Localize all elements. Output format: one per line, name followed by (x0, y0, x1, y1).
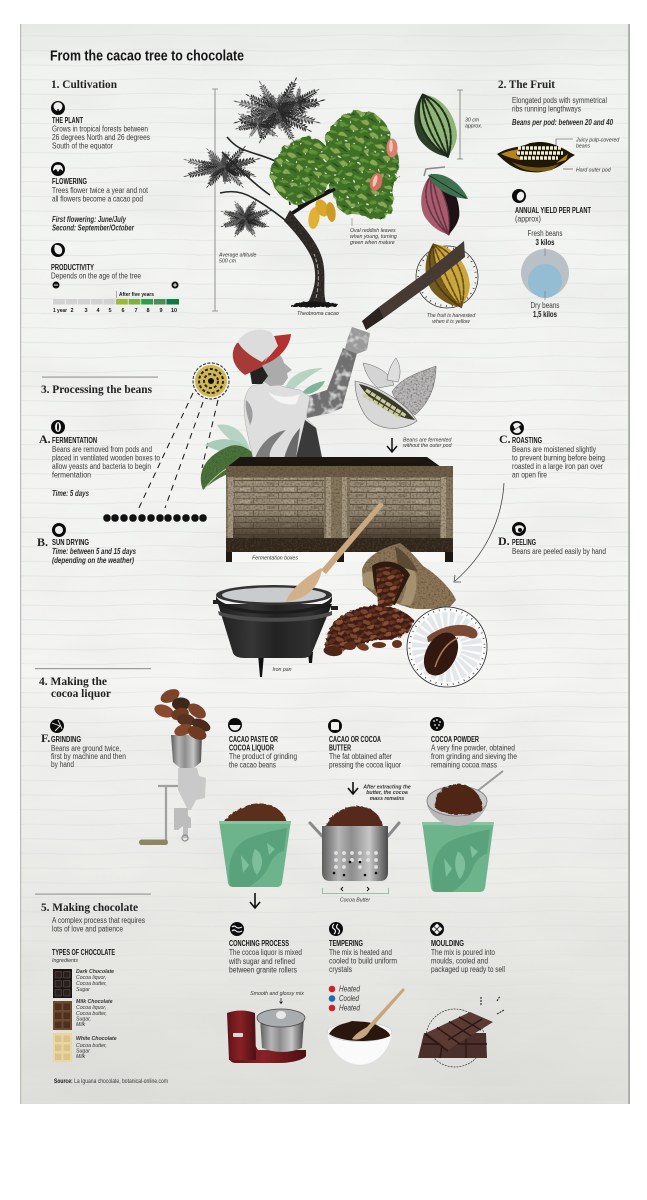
caption: glossy mix (250, 991, 304, 1004)
caption: mass remains: butter, the cocoa (366, 790, 408, 796)
milk chocolate text (76, 999, 113, 1028)
wooden spoon (286, 502, 384, 602)
text block: intro: A complex process that requires (52, 916, 145, 925)
upper chocolate bar (425, 1012, 493, 1052)
hand grinder (139, 686, 212, 845)
text block: moulding: MOULDING (431, 939, 464, 948)
leader: juicy beans: beans (576, 144, 591, 150)
caption: leaves (350, 218, 397, 246)
heading: cocoa liquor (39, 674, 111, 700)
milk chocolate text: Milk Chocolate (76, 999, 113, 1005)
text block: moulding: moulds, cooled and (431, 956, 488, 966)
text block: roasting: roasted in a large iron pan over (512, 462, 603, 471)
text block: productivity: Depends on the age of the tree (51, 272, 141, 280)
grinder hopper (171, 735, 202, 768)
text block: cacao paste: the cacao beans (229, 760, 276, 770)
illustration: cacao tree (181, 70, 399, 317)
text block: peeling: PEELING (512, 538, 536, 547)
text block: the plant: Grows in tropical forests between (52, 124, 148, 134)
roasted bean (417, 625, 477, 681)
farmer cap visor (262, 334, 291, 365)
yellow pods (307, 197, 337, 230)
farmer (233, 327, 370, 458)
black and white foliage (181, 70, 328, 244)
dial ticks (418, 248, 476, 306)
dial (426, 1009, 484, 1067)
heading: processing: 3. Processing the beans (41, 382, 152, 396)
white chocolate text: Milk (76, 1054, 86, 1060)
altitude ruler: Average altitude (218, 252, 257, 258)
sieve with powder (427, 771, 503, 826)
caption: glossy mix: Smooth and glossy mix (250, 991, 304, 997)
bowl rim (327, 1022, 392, 1042)
text block: peeling (498, 534, 606, 556)
icon: tempering (329, 922, 343, 936)
text block: sun drying: Time: between 5 and 15 days (52, 547, 137, 556)
caption: iron pan: Iron pan (272, 667, 292, 673)
milk chocolate text: Milk (76, 1022, 86, 1028)
productivity scale chart: 5 (108, 308, 112, 314)
cocoa butter bracket: Cocoa Butter (340, 898, 370, 904)
text block: flowering (52, 177, 149, 232)
productivity scale chart: 4 (96, 308, 100, 314)
heading: The Fruit: 2. The Fruit (498, 77, 555, 91)
section rule (35, 668, 151, 669)
text block: fermentation: fermentation (52, 470, 91, 480)
panel: 2. The Fruit (497, 77, 620, 319)
text block: intro: lots of love and patience (52, 924, 123, 934)
wet grinder machine (227, 1009, 306, 1063)
machine base (229, 1045, 306, 1063)
text block: conching: between granite rollers (229, 966, 297, 974)
text block: cacao paste: CACAO PASTE OR (229, 735, 278, 744)
text block: roasting: to prevent burning before being (512, 454, 605, 462)
white chocolate text: White Chocolate (76, 1036, 117, 1042)
size ruler: 30 cm: approx. (465, 124, 482, 130)
pan legs (258, 652, 313, 677)
text block: peeling: Beans are peeled easily by hand (512, 547, 606, 556)
icon: flowering (51, 162, 65, 176)
text block: annual yield (515, 206, 591, 224)
pan water (222, 588, 326, 602)
text block: types of chocolate: TYPES OF CHOCOLATE (52, 948, 115, 957)
icon: fermentation (51, 420, 65, 434)
sieve rim (427, 786, 487, 816)
sack opening (372, 561, 410, 605)
trunk and branches (220, 137, 338, 307)
machine motor (227, 1010, 256, 1060)
text block: grinding: Beans are ground twice, (51, 744, 121, 753)
text block: cocoa powder: A very fine powder, obtained (431, 744, 515, 752)
mixing bowl (327, 988, 405, 1065)
machete (362, 241, 465, 330)
sieve handle (476, 771, 503, 792)
altitude ruler: 500 cm (219, 258, 237, 264)
productivity scale chart: 8 (146, 308, 150, 314)
productivity scale chart: 10 (171, 308, 177, 314)
tempering legend: Heated (339, 984, 361, 994)
branch to yellow pods (298, 189, 335, 207)
text block: tempering: crystals (329, 965, 352, 974)
yield circles chart: Fresh beans (528, 229, 563, 238)
text block: conching: The cocoa liquor is mixed (229, 948, 302, 957)
icon: cacao paste (228, 718, 242, 732)
machine lid knob (276, 1011, 286, 1019)
text block: cocoa butter: pressing the cocoa liquor (329, 760, 401, 770)
leader: juicy beans (556, 138, 620, 150)
farmer cap crown (238, 330, 278, 362)
grinder clamp (174, 808, 191, 838)
pan rim (216, 585, 332, 605)
text block: cocoa butter: BUTTER (329, 744, 351, 752)
curved arrow to roasted bean (454, 483, 504, 582)
text block: flowering: all flowers become a cacao pod (52, 194, 143, 204)
text block: cocoa butter: The fat obtained after (329, 752, 392, 761)
text block: intro (52, 916, 145, 934)
white chocolate text: Cocoa butter, (76, 1043, 107, 1049)
text block: moulding: packaged up ready to sell (431, 965, 505, 974)
illustration: pod cross-section (497, 142, 575, 172)
farmer hand (345, 327, 370, 354)
arrow to press (348, 782, 358, 794)
text block: fermentation: FERMENTATION (52, 436, 97, 445)
yield circles chart: 3 kilos (536, 238, 555, 247)
text block: cocoa powder: remaining cocoa mass (431, 760, 497, 770)
milk chocolate bar (53, 1001, 72, 1030)
grinder beans (153, 686, 212, 743)
altitude ruler (212, 89, 257, 311)
panel: pods (362, 87, 482, 330)
text block: fruit description (512, 96, 614, 127)
productivity scale chart: 2 (70, 308, 74, 314)
farmer hair (250, 366, 268, 384)
productivity scale chart: 6 (121, 308, 125, 314)
tempering legend: Cooled (339, 994, 360, 1003)
icon: conching (230, 922, 244, 936)
crate underside gap (232, 550, 446, 562)
text block: fermentation: Time: 5 days (52, 489, 90, 498)
text block: grinding: by hand (51, 760, 74, 769)
chocolate bars with dial (418, 1009, 493, 1067)
dark chocolate text (76, 969, 114, 993)
farmer shirt shadows (246, 392, 322, 458)
white chocolate bar (53, 1033, 72, 1062)
leaves behind farmer (201, 368, 325, 490)
text block: roasting (499, 432, 605, 480)
text block: cocoa butter: CACAO OR COCOA (329, 735, 381, 744)
section rule (42, 376, 158, 378)
bowl spoon (352, 988, 405, 1040)
cocoa heap on bucket (223, 803, 287, 823)
caption: outer pod (403, 438, 453, 449)
text block: the plant: 26 degrees North and 26 degrees (52, 133, 150, 142)
text block: moulding (431, 939, 505, 974)
melted chocolate (329, 1021, 390, 1041)
bean heap (325, 606, 414, 651)
caption: mass remains: After extracting the (362, 784, 411, 790)
text block: flowering: FLOWERING (52, 177, 87, 186)
tempering legend (329, 984, 361, 1012)
icon: productivity (51, 243, 65, 257)
caption: outer pod: Beans are fermented (403, 438, 453, 444)
caption: fruit harvested: The fruit is harvested (427, 313, 476, 319)
icon: moulding (430, 922, 444, 936)
pan body (218, 604, 332, 658)
milk chocolate text: Cocoa liquor, (76, 1005, 106, 1011)
machine drum (260, 1018, 304, 1052)
milk chocolate text: Cocoa butter, (76, 1011, 107, 1017)
text block: flowering: Second: September/October (52, 224, 135, 232)
text block: cocoa powder: COCOA POWDER (431, 735, 479, 744)
powder heap (435, 784, 482, 815)
grey pods illustration (355, 358, 436, 428)
caption: mass remains: mass remains (370, 796, 404, 802)
text block: productivity (51, 263, 141, 280)
grinder body (178, 768, 206, 810)
text block: tempering: cooled to build uniform (329, 956, 397, 966)
caption: boxes: Fermentation boxes (252, 556, 298, 562)
text block: fermentation: A. (39, 432, 51, 446)
title: From the cacao tree to chocolate (50, 48, 244, 64)
farmer arm (305, 348, 357, 418)
fermentation sun icon (193, 363, 229, 399)
text block: grinding: first by machine and then (51, 752, 126, 761)
arrow to boxes (387, 438, 397, 452)
text block: fruit description: Beans per pod: between 20 and 40 (512, 118, 614, 127)
text block: fermentation (39, 432, 161, 498)
green foliage: right lobe (325, 110, 399, 219)
leader: hard outer pod: Hard outer pod (576, 168, 612, 174)
text block: roasting: ROASTING (512, 436, 542, 445)
icon: annual yield (512, 189, 526, 203)
text block: cocoa butter (329, 735, 401, 770)
dark chocolate text: Cocoa butter, (76, 981, 107, 987)
yellow pod (414, 236, 479, 316)
grinder handle (139, 840, 168, 845)
arrow to conching (250, 893, 260, 908)
pan handle nubs (213, 600, 338, 610)
sack shadow (395, 546, 418, 572)
crate top opening (226, 457, 441, 468)
press handles (310, 823, 399, 836)
text block: tempering (329, 939, 397, 974)
panel: 1. Cultivation (51, 70, 399, 317)
icon: roasting (510, 421, 524, 435)
dark chocolate text: Dark Chocolate (76, 969, 114, 975)
dark chocolate text: Sugar (76, 987, 90, 993)
small red pods (368, 138, 398, 192)
dashed sun rays (137, 393, 218, 512)
text block: cacao paste (229, 735, 297, 770)
text block: grinding: GRINDING (51, 735, 81, 744)
falling beans (376, 567, 404, 606)
productivity scale chart: 7 (134, 308, 138, 314)
caption: fruit harvested (427, 313, 476, 325)
productivity scale chart: 9 (159, 308, 163, 314)
green bucket: liquor (219, 821, 291, 887)
bowl body (327, 1032, 392, 1065)
text block: roasting: C. (499, 432, 511, 446)
heading: cocoa liquor: 4. Making the (39, 674, 107, 688)
text block: cacao paste: COCOA LIQUOR (229, 744, 274, 752)
text block: tempering: TEMPERING (329, 939, 363, 948)
text block: productivity: PRODUCTIVITY (51, 263, 95, 272)
row of drying beans (103, 514, 207, 522)
text block: conching: with sugar and refined (228, 957, 295, 966)
icon: sun drying (52, 523, 66, 537)
productivity scale chart: 3 (84, 308, 88, 314)
text block: annual yield: (approx) (515, 214, 541, 224)
section rule (35, 894, 151, 895)
crate legs (226, 546, 453, 562)
grinder crank (158, 786, 180, 842)
panel: 4. Making the cocoa liquor (35, 668, 517, 908)
text block: conching: CONCHING PROCESS (229, 939, 289, 948)
white chocolate text (76, 1036, 117, 1060)
caption: fruit harvested: when it is yellow (432, 319, 471, 325)
milk chocolate text: Sugar, (76, 1016, 91, 1022)
text block: roasting: Beans are moistened slightly (512, 445, 596, 454)
farmer face (262, 353, 292, 386)
text block: sun drying: (depending on the weather) (52, 556, 134, 565)
dark chocolate text: Cocoa liquor, (76, 975, 106, 981)
text block: cacao paste: The product of grinding (229, 752, 297, 761)
sieve bowl (427, 805, 487, 826)
text block: grinding (41, 731, 126, 769)
size ruler: 30 cm (457, 90, 482, 159)
text block: the plant (52, 116, 150, 150)
icon: cocoa butter (328, 719, 342, 733)
dark chocolate bar (53, 969, 72, 998)
text block: roasting: an open fire (512, 470, 547, 480)
text block: grinding: F. (41, 731, 50, 745)
press holes (334, 851, 378, 869)
icon: grinding (50, 719, 64, 733)
productivity scale chart (52, 282, 179, 314)
farmer cap back (233, 340, 268, 375)
sack folds (362, 560, 417, 606)
text block: sun drying: B. (37, 535, 48, 549)
text block: flowering: First flowering: June/July (52, 215, 127, 224)
iron pan (213, 585, 338, 677)
heading: Cultivation: 1. Cultivation (51, 77, 117, 91)
heading: cocoa liquor: cocoa liquor (51, 686, 111, 700)
text block: cocoa powder (431, 735, 517, 770)
text block: fermentation: allow yeasts and bacteria to begin (52, 462, 151, 471)
text block: the plant: THE PLANT (52, 116, 83, 125)
caption: leaves: when young, turning (350, 234, 397, 240)
text block: the plant: South of the equator (52, 142, 113, 150)
machine label (233, 1033, 243, 1037)
white chocolate text: Sugar (76, 1048, 90, 1054)
sack body (362, 543, 456, 609)
crate body (226, 466, 453, 552)
text block: fermentation: placed in ventilated wooden boxes to (52, 454, 161, 462)
press heap (325, 806, 383, 827)
panel: 3. Processing the beans (37, 327, 606, 687)
loose beans (323, 640, 402, 657)
tempering legend: Heated (339, 1004, 361, 1012)
text block: moulding: The mix is poured into (431, 948, 496, 957)
machine lid (257, 1009, 305, 1027)
leader: juicy beans: Juicy pulp-covered (575, 138, 620, 144)
text block: peeling: D. (498, 534, 510, 548)
green bucket: powder (422, 822, 494, 892)
text block: sun drying: SUN DRYING (52, 538, 89, 547)
roasted bean dial (407, 607, 487, 687)
press body (322, 826, 388, 881)
productivity scale chart: After five years (119, 292, 154, 298)
dashes around chocolate (481, 996, 504, 1014)
text block: tempering: The mix is heated and (329, 948, 392, 957)
text block: fruit description: Elongated pods with symmetrical (512, 96, 607, 105)
icon: peeling (512, 522, 526, 536)
lower chocolate bar (418, 1033, 487, 1058)
circular dial (416, 246, 478, 308)
yield circles chart: 1,5 kilos (533, 310, 558, 319)
caption: leaves: Oval reddish leaves (350, 228, 396, 234)
caption: leaves: green when mature (350, 240, 395, 246)
text block: conching (228, 939, 302, 974)
caption: theobroma: Theobroma cacao (297, 311, 339, 317)
yield circles chart (521, 229, 569, 319)
icon: cocoa powder (430, 717, 444, 731)
text block: fermentation: Beans are removed from pods and (52, 445, 152, 454)
text block: types of chocolate: Ingredients (52, 958, 78, 964)
text block: types of chocolate (52, 948, 115, 964)
steel press pot (310, 806, 399, 881)
heading: making chocolate: 5. Making chocolate (41, 900, 138, 914)
source line: Source: La Iguana chocolate, botanical-online.com (54, 1078, 168, 1085)
fermentation crate (226, 457, 453, 562)
text block: cocoa powder: from grinding and sieving the (431, 752, 517, 761)
text block: sun drying (37, 535, 137, 565)
pan band (218, 611, 332, 622)
size ruler: 30 cm: 30 cm (465, 118, 480, 124)
text block: annual yield: ANNUAL YIELD PER PLANT (515, 206, 591, 215)
press drips (333, 861, 377, 876)
spilled beans (323, 606, 414, 657)
cocoa butter bracket (322, 887, 388, 904)
grinder clamp screw (182, 835, 188, 841)
caption: outer pod: without the outer pod (403, 443, 453, 449)
green foliage: left lobe (270, 138, 332, 205)
panel: 5. Making chocolate (35, 894, 505, 1085)
text block: fruit description: ribs running lengthways (512, 104, 581, 114)
red pod with leaf (414, 167, 468, 240)
productivity scale chart: 1 year (53, 308, 68, 314)
caption: mass remains (362, 784, 411, 802)
text block: flowering: Trees flower twice a year and not (52, 186, 149, 195)
yield circles chart: Dry beans (530, 301, 560, 310)
farmer shirt (244, 382, 322, 458)
green pod (404, 87, 466, 165)
burlap sack of beans (362, 543, 456, 609)
icon: plant (51, 101, 65, 115)
